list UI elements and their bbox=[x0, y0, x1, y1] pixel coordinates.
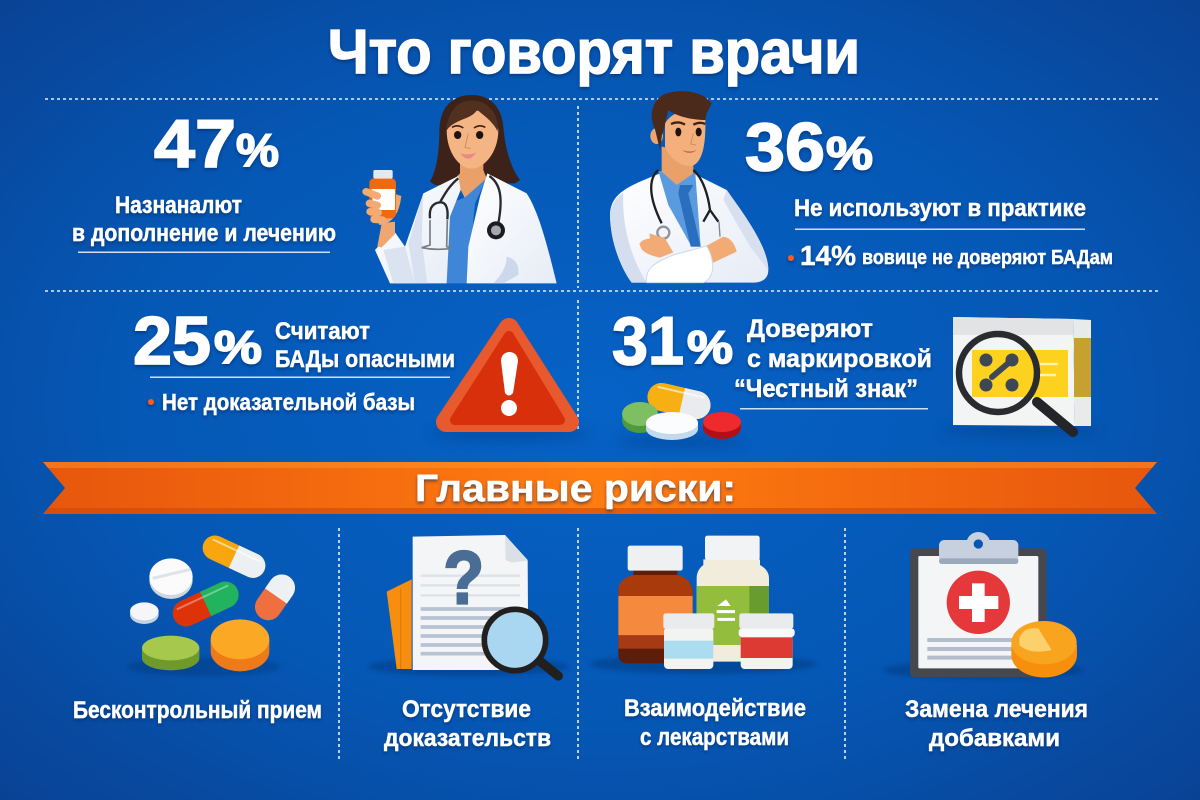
panel: 31% trust labelling bbox=[612, 303, 1100, 447]
bullet: no evidence: Нет доказательной базы bbox=[162, 389, 415, 415]
dividers bbox=[45, 99, 1160, 760]
risk: replacing treatment bbox=[883, 532, 1088, 752]
bullet: 14%: 14% bbox=[800, 240, 856, 271]
risk: drug interaction bbox=[590, 536, 817, 751]
stat: 31%: 31 bbox=[612, 303, 684, 379]
icon: clipboard with tablet bbox=[883, 532, 1083, 679]
text: consider dangerous: Считают bbox=[275, 318, 370, 345]
label: с лекарствами bbox=[640, 724, 789, 751]
banner: main risks bbox=[43, 462, 1157, 514]
panel: 25% dangerous bbox=[133, 303, 590, 440]
text: trust with marking: “Честный знак” bbox=[734, 375, 918, 403]
stat: 36%: % bbox=[826, 127, 873, 179]
stat: 47%: 47 bbox=[154, 106, 236, 182]
label: Взаимодействие bbox=[624, 695, 806, 722]
underline bbox=[740, 408, 928, 410]
bullet: 14%: вовице не доверяют БАДам bbox=[862, 246, 1113, 269]
label bbox=[384, 696, 551, 752]
icon: pills bbox=[615, 380, 745, 447]
stat: 36%: 36 bbox=[745, 109, 825, 185]
title: Что говорят врачи bbox=[328, 18, 860, 87]
underline bbox=[78, 252, 330, 253]
underline bbox=[150, 376, 450, 378]
label: Замена лечения bbox=[905, 696, 1088, 723]
text: prescribe: Назнаналют bbox=[115, 192, 242, 219]
icon: document with question and magnifier bbox=[368, 535, 568, 676]
stat: 31% bbox=[612, 303, 733, 379]
stat: 25% bbox=[133, 303, 262, 379]
icon: box under magnifier bbox=[940, 317, 1100, 436]
bullet: 14% bbox=[788, 240, 1113, 271]
stat: 47% bbox=[154, 106, 279, 182]
stat: 36% bbox=[745, 109, 873, 185]
stat: 25%: % bbox=[214, 321, 262, 373]
stat: 25%: 25 bbox=[133, 303, 211, 379]
text: prescribe: в дополнение и лечению bbox=[72, 220, 336, 247]
text: consider dangerous: БАДы опасными bbox=[275, 346, 455, 373]
risk: no evidence bbox=[368, 535, 568, 752]
text: consider dangerous bbox=[275, 318, 455, 373]
label bbox=[905, 696, 1088, 752]
label bbox=[624, 695, 806, 751]
label: добавками bbox=[929, 725, 1060, 752]
icon: bottles bbox=[590, 536, 817, 674]
text: trust with marking: Доверяют bbox=[747, 315, 873, 343]
panel: 47% prescribe bbox=[72, 95, 557, 283]
text: prescribe bbox=[72, 192, 336, 247]
icon: male doctor arms crossed bbox=[610, 91, 768, 283]
icon: document with question and magnifier: ? bbox=[443, 535, 484, 619]
text: trust with marking: с маркировкой bbox=[747, 345, 932, 373]
underline bbox=[795, 228, 1085, 230]
label: Отсутствие bbox=[402, 696, 531, 723]
icon: assorted pills bbox=[127, 531, 300, 676]
text: trust with marking bbox=[734, 315, 932, 403]
icon: female doctor with bottle bbox=[366, 95, 557, 283]
heading: Главные риски: bbox=[415, 468, 736, 510]
label: Бесконтрольный прием bbox=[73, 697, 322, 724]
stat: 47%: % bbox=[236, 124, 279, 176]
panel: 36% do not use bbox=[610, 91, 1113, 283]
stat: 31%: % bbox=[687, 321, 733, 373]
label: доказательств bbox=[384, 725, 551, 752]
risk: uncontrolled use bbox=[73, 531, 322, 724]
icon: warning triangle bbox=[430, 328, 590, 440]
text: do not use in practice: Не используют в практике bbox=[794, 195, 1086, 222]
